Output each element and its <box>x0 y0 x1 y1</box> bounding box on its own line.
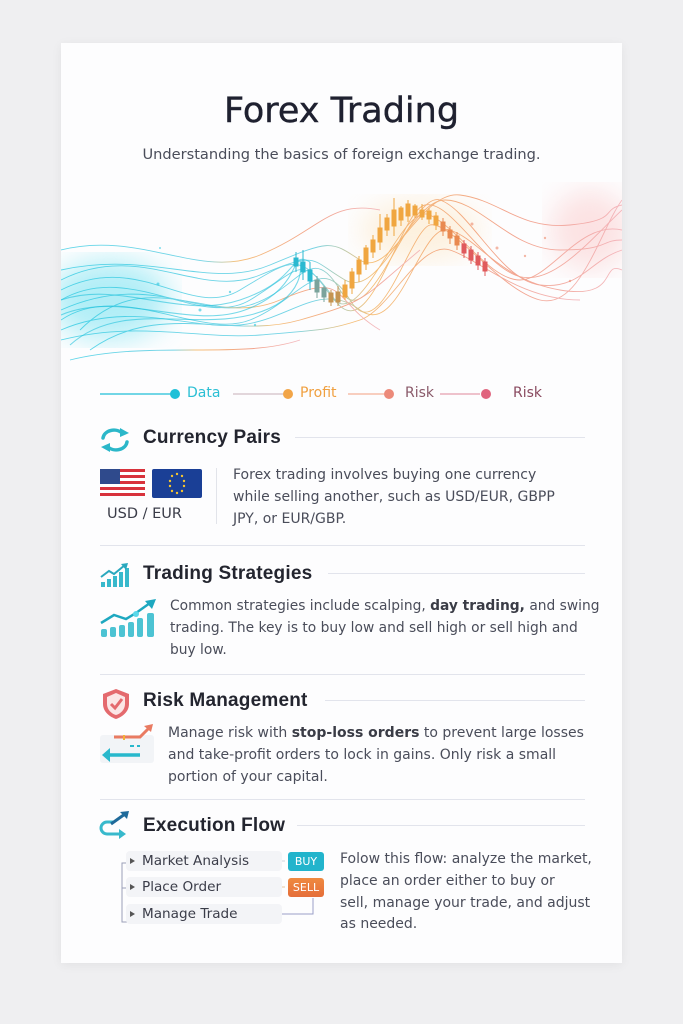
step: place order <box>126 877 282 897</box>
tag: sell <box>288 878 324 897</box>
text: JPY, or EUR/GBP. <box>233 511 346 527</box>
legend: Risk <box>513 385 542 401</box>
text: Forex trading involves buying one currency <box>233 467 536 483</box>
tag: buy <box>288 852 324 871</box>
step: place order: Place Order <box>142 879 221 895</box>
heading: Risk Management <box>143 690 308 711</box>
step: market analysis: Market Analysis <box>142 853 249 869</box>
label: USD / EUR <box>107 506 182 522</box>
legend: Risk <box>405 385 434 401</box>
legend: Profit <box>300 385 337 401</box>
heading: Execution Flow <box>143 815 285 836</box>
section: currency pairs <box>100 427 585 527</box>
icon: eu flag <box>152 469 202 498</box>
text: Folow this flow: analyze the market, <box>340 851 592 867</box>
text <box>340 851 592 932</box>
text: Common strategies include scalping, day trading, and swing <box>170 598 599 614</box>
text <box>168 725 584 785</box>
icon: growth chart <box>100 599 156 637</box>
section: trading strategies <box>100 563 599 658</box>
tag: sell: SELL <box>293 881 319 894</box>
text: trading. The key is to buy low and sell high or sell high and <box>170 620 578 636</box>
icon: small chart <box>100 563 129 587</box>
step: manage trade: Manage Trade <box>142 906 238 922</box>
icon: us flag <box>100 469 145 496</box>
flags <box>100 469 202 522</box>
text: as needed. <box>340 916 417 932</box>
legend: Data <box>187 385 220 401</box>
icon: flow arrow <box>100 811 129 839</box>
section: risk management <box>100 689 585 785</box>
text: place an order either to buy or <box>340 873 555 889</box>
step: market analysis <box>126 851 282 871</box>
legend <box>100 385 542 401</box>
text: while selling another, such as USD/EUR, GBPP <box>233 489 555 505</box>
tag: buy: BUY <box>295 855 317 868</box>
heading: Currency Pairs <box>143 427 281 448</box>
subtitle: Understanding the basics of foreign exchange trading. <box>142 146 541 163</box>
card <box>61 43 622 963</box>
text: Manage risk with stop-loss orders to prevent large losses <box>168 725 584 741</box>
title: Forex Trading <box>224 91 459 131</box>
step: manage trade <box>126 904 282 924</box>
text: and take-profit orders to lock in gains. Only risk a small <box>168 747 556 763</box>
icon: exchange arrows <box>101 428 129 452</box>
section: execution flow <box>100 811 592 932</box>
chart: wave candlesticks <box>61 186 622 360</box>
text: buy low. <box>170 642 227 658</box>
text <box>170 598 599 658</box>
text: portion of your capital. <box>168 769 328 785</box>
heading: Trading Strategies <box>143 563 312 584</box>
text: sell, manage your trade, and adjust <box>340 895 590 911</box>
flow diagram <box>122 860 314 922</box>
text <box>232 467 555 527</box>
icon: stop-loss arrows <box>100 724 154 763</box>
icon: shield <box>103 689 129 719</box>
